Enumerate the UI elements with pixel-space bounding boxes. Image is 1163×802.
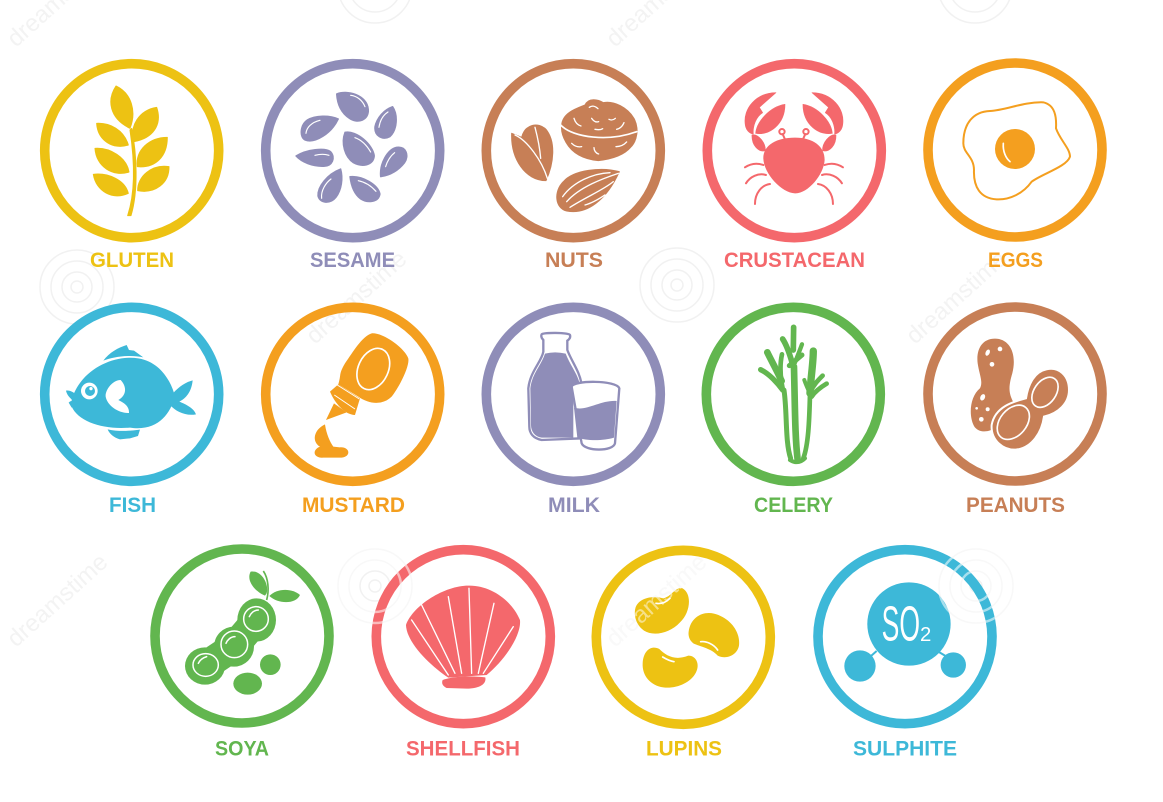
allergen: celery	[706, 307, 880, 517]
watermark: dreamstime	[2, 549, 113, 652]
allergen: sesame	[266, 64, 440, 272]
label: CRUSTACEAN	[724, 249, 865, 272]
icon: SO2 molecule: SO	[882, 597, 920, 652]
label: EGGS	[988, 249, 1043, 272]
watermark overlay: dreamstime	[601, 549, 712, 652]
label: FISH	[109, 494, 156, 517]
icon: sesame seeds	[296, 92, 407, 202]
icon: fish	[66, 345, 196, 439]
icon: SO2 molecule	[844, 582, 966, 682]
allergen: mustard	[266, 307, 440, 517]
watermark: dreamstime	[901, 246, 1012, 349]
allergen: gluten	[45, 64, 219, 272]
allergen: sulphite	[818, 550, 992, 760]
watermark: dreamstime	[601, 549, 712, 652]
icon: fried egg	[963, 102, 1070, 199]
allergen: fish	[45, 307, 219, 517]
icon: milk bottle and glass	[528, 333, 619, 450]
label: SOYA	[215, 738, 269, 760]
icon: peanuts	[971, 339, 1069, 450]
label: SHELLFISH	[406, 738, 520, 760]
label: PEANUTS	[966, 494, 1065, 517]
icon: crab	[745, 93, 843, 204]
icon: wheat	[93, 86, 169, 216]
label: NUTS	[545, 249, 603, 272]
allergen: eggs	[928, 63, 1102, 272]
label: CELERY	[754, 494, 833, 517]
watermark: dreamstime	[301, 246, 412, 349]
watermark overlay	[338, 549, 1013, 652]
allergen: nuts	[486, 64, 660, 272]
label: GLUTEN	[90, 249, 174, 272]
allergen: crustacean	[707, 64, 881, 272]
label: SULPHITE	[853, 738, 957, 760]
watermark	[2, 0, 1013, 652]
icon: celery	[761, 327, 827, 462]
icon: nuts	[512, 100, 637, 212]
allergen: milk	[486, 307, 660, 517]
allergen: lupins	[596, 550, 770, 760]
allergen: soya	[155, 549, 329, 760]
icon: scallop shell	[406, 586, 520, 689]
icon: soya pod	[185, 571, 300, 695]
allergen: shellfish	[376, 550, 550, 760]
allergen: peanuts	[928, 307, 1102, 517]
label: MUSTARD	[302, 494, 405, 517]
label: LUPINS	[646, 738, 722, 760]
icon: SO2 molecule: 2	[920, 623, 931, 646]
icon: mustard bottle	[315, 333, 408, 458]
label: MILK	[548, 494, 600, 517]
label: SESAME	[310, 249, 395, 272]
icon: lupin beans	[635, 588, 739, 688]
